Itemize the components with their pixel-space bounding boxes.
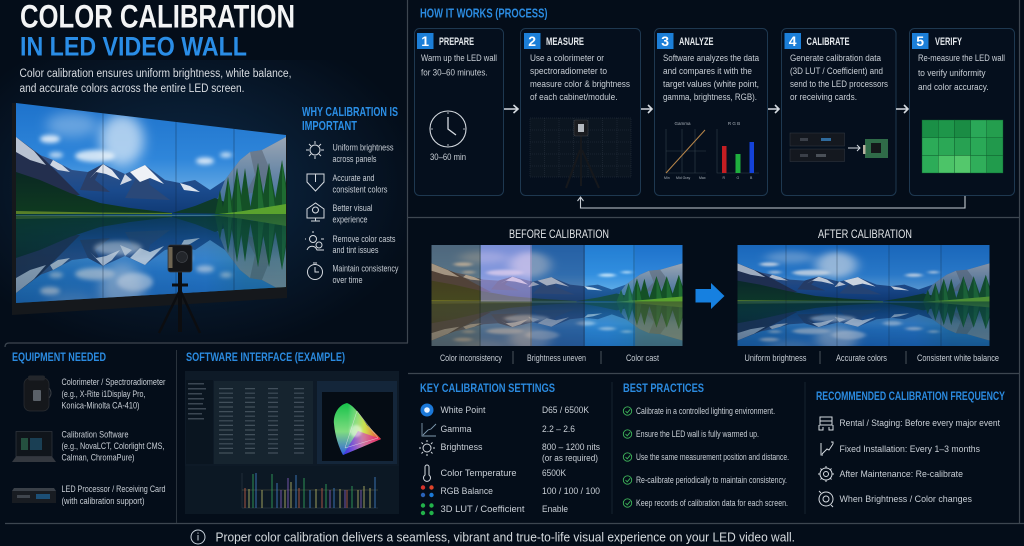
icon: monitor house <box>307 203 324 221</box>
software text: Calman, ChromaPure) <box>62 452 134 464</box>
item text: uniform brightness: across panels <box>332 154 377 165</box>
panel: key calibration settings: KEY CALIBRATION SETTINGS <box>420 381 555 395</box>
step 2: measure: spectroradiometer to <box>530 66 607 77</box>
step 4: calibrate: (3D LUT / Coefficient) and <box>790 66 883 77</box>
step 1: prepare: 30–60 min <box>430 152 466 163</box>
title: IN LED VIDEO WALL <box>20 32 247 62</box>
setting: RGB balance <box>440 486 600 497</box>
before captions: Color cast <box>626 353 659 364</box>
step 5: verify: and color accuracy. <box>918 82 988 93</box>
processor text: (with calibration support) <box>62 496 144 507</box>
item text: colour casts: and tint issues <box>332 245 379 256</box>
icon: colorimeter <box>24 376 51 411</box>
table rows <box>188 383 304 454</box>
step 5: verify <box>910 28 1014 196</box>
panel: best practices: BEST PRACTICES <box>623 381 704 395</box>
colorimeter text <box>62 377 166 412</box>
step 4: calibrate: send to the LED processors <box>790 79 888 90</box>
icon: thermometer <box>424 465 430 481</box>
item text: accurate colors <box>332 173 388 196</box>
item text: accurate colors: Accurate and <box>332 173 374 184</box>
icon: colour shield <box>307 174 324 191</box>
setting: brightness: Brightness <box>440 442 483 453</box>
step 1: prepare: 1 <box>421 33 429 49</box>
step 3: analyze: 3 <box>661 33 669 49</box>
RGB bar chart: R G B <box>728 121 740 126</box>
step 3: analyze: target values (white point, <box>663 79 759 90</box>
step 2: measure: MEASURE <box>546 36 584 48</box>
panel: key calibration settings <box>419 381 600 515</box>
step 2: measure <box>520 28 640 196</box>
arrow <box>896 105 908 113</box>
step 1: prepare: Warm up the LED wall <box>421 53 497 64</box>
how it works heading: HOW IT WORKS (PROCESS) <box>420 6 548 20</box>
before calibration: BEFORE CALIBRATION <box>509 229 609 241</box>
icon: fixed install <box>821 442 833 455</box>
colorimeter text: (e.g., X-Rite i1Display Pro, <box>62 389 146 400</box>
step 5: verify: to verify uniformity <box>918 68 986 79</box>
icon: clock <box>430 111 466 147</box>
item text: uniform brightness <box>332 142 394 165</box>
step 3: analyze: gamma, brightness, RGB). <box>663 92 757 103</box>
step 1: prepare: PREPARE <box>439 36 474 48</box>
icon: rental <box>819 417 833 430</box>
gamma chart: Mid Gray <box>676 176 690 180</box>
setting: 3D LUT: Enable <box>542 504 568 515</box>
title <box>20 0 295 62</box>
RGB bar chart: G <box>736 176 740 180</box>
setting: brightness: 800 – 1200 nits <box>542 442 600 453</box>
colorimeter text: Colorimeter / Spectroradiometer <box>62 377 166 388</box>
measurement grid <box>530 118 631 177</box>
icon: laptop <box>12 432 56 462</box>
intro text: and accurate colors across the entire LED screen. <box>20 83 244 95</box>
panel: software interface: SOFTWARE INTERFACE (EXAMPLE) <box>186 350 345 364</box>
setting: colour temperature: 6500K <box>542 468 567 479</box>
item text: better visual <box>332 203 372 226</box>
intro text <box>20 68 292 95</box>
icon: colour cast <box>305 231 324 250</box>
icon: gear <box>818 466 834 482</box>
after image <box>738 240 993 364</box>
item text: colour casts: Remove color casts <box>332 234 396 245</box>
step 2: measure: of each cabinet/module. <box>530 92 618 103</box>
receiving card <box>863 139 888 158</box>
practices text: Re-calibrate periodically to maintain consistency. <box>636 475 787 485</box>
intro text: Color calibration ensures uniform brightness, white balance, <box>20 68 292 80</box>
item text: consistency: over time <box>332 275 362 286</box>
step 2: measure: measure color & brightness <box>530 79 630 90</box>
processor text: LED Processor / Receiving Card <box>62 484 166 495</box>
left background glow <box>0 60 407 342</box>
frequency: change: When Brightness / Color changes <box>840 494 972 505</box>
arrow to card <box>848 145 860 151</box>
LED wall with camera <box>12 90 290 340</box>
item text: consistency: Maintain consistency <box>332 264 399 274</box>
setting: brightness: (or as required) <box>542 453 598 464</box>
gamma chart: Gamma <box>674 121 691 126</box>
why calibration is important: IMPORTANT <box>302 119 357 133</box>
step 4: calibrate: Generate calibration data <box>790 53 882 64</box>
frequency: rental: Rental / Staging: Before every major event <box>840 418 1000 429</box>
RGB bar chart: B <box>750 176 753 180</box>
processor text <box>62 484 166 507</box>
setting: 3D LUT <box>440 504 568 515</box>
icon: stopwatch <box>308 263 322 280</box>
setting: gamma: 2.2 – 2.6 <box>542 424 575 435</box>
practices text: Keep records of calibration data for each screen. <box>636 498 788 508</box>
icon: cycle gear <box>819 491 833 507</box>
tripod <box>159 272 200 333</box>
frequency: maintenance: After Maintenance: Re-calibrate <box>840 469 963 480</box>
return arrow <box>578 196 965 208</box>
step 3: analyze <box>654 28 768 196</box>
after captions <box>744 351 999 364</box>
after calibration <box>738 229 999 364</box>
bar chart <box>242 473 378 508</box>
blue arrow <box>696 283 724 309</box>
panel: equipment needed: EQUIPMENT NEEDED <box>12 350 106 364</box>
step 5: verify: 5 <box>916 33 924 49</box>
arrow <box>504 105 518 113</box>
icon: info <box>191 530 205 544</box>
tripod and meter <box>566 120 599 188</box>
item text: uniform brightness: Uniform brightness <box>332 142 394 154</box>
setting: gamma <box>440 424 575 435</box>
setting: RGB balance: RGB Balance <box>440 486 493 497</box>
setting: white point: D65 / 6500K <box>542 405 590 416</box>
step 3: analyze: ANALYZE <box>679 36 714 48</box>
icon: gamma curve <box>422 423 436 436</box>
after captions: Uniform brightness <box>744 353 807 364</box>
item text: consistency <box>332 264 399 286</box>
icon: white point <box>420 404 434 416</box>
icon: brightness <box>419 440 435 456</box>
setting: gamma: Gamma <box>440 424 472 435</box>
after captions: Consistent white balance <box>917 353 999 364</box>
step 4: calibrate: 4 <box>789 33 797 49</box>
after calibration: AFTER CALIBRATION <box>818 229 912 241</box>
step 3: analyze: Software analyzes the data <box>663 53 760 64</box>
practices text: Calibrate in a controlled lighting environment. <box>636 406 775 416</box>
setting: white point: White Point <box>440 405 486 416</box>
setting: colour temperature <box>440 468 567 479</box>
panel: equipment needed <box>12 350 166 507</box>
before captions: Color inconsistency <box>440 353 502 364</box>
camera head <box>168 245 192 272</box>
step 4: calibrate: CALIBRATE <box>806 36 850 48</box>
RGB bar chart: R <box>722 176 726 180</box>
item text: better visual: experience <box>332 214 368 226</box>
icon: sun <box>306 141 324 159</box>
software text: (e.g., NovaLCT, Colorlight CMS, <box>62 441 164 452</box>
arrow <box>768 105 779 113</box>
software window <box>185 371 399 514</box>
setting: colour temperature: Color Temperature <box>440 468 516 479</box>
before image <box>432 240 686 364</box>
processors <box>790 133 844 162</box>
practices text <box>636 406 789 508</box>
item text: accurate colors: consistent colors <box>332 184 388 196</box>
step 1: prepare: for 30–60 minutes. <box>421 68 488 78</box>
panel: software interface <box>185 350 399 514</box>
setting: 3D LUT: 3D LUT / Coefficient <box>440 504 525 515</box>
before captions: Brightness uneven <box>527 353 586 364</box>
panel: recommended calibration frequency <box>816 389 1005 507</box>
practices text: Ensure the LED wall is fully warmed up. <box>636 429 759 439</box>
panel: best practices <box>623 381 789 508</box>
item text: colour casts <box>332 234 396 256</box>
before calibration <box>432 229 686 364</box>
green uniformity grid <box>922 120 1003 173</box>
practices text: Use the same measurement position and distance. <box>636 452 789 462</box>
setting: RGB balance: 100 / 100 / 100 <box>542 486 600 497</box>
setting: brightness <box>440 442 600 464</box>
icon: green dots <box>421 503 434 515</box>
before captions <box>440 351 659 364</box>
gamma chart <box>664 121 706 180</box>
why calibration is important: WHY CALIBRATION IS <box>302 105 398 119</box>
icon: RGB dots <box>421 485 434 497</box>
software text <box>62 430 164 464</box>
RGB bar chart <box>717 121 759 180</box>
after captions: Accurate colors <box>836 353 887 364</box>
why calibration is important <box>302 105 399 286</box>
footer message: Proper color calibration delivers a seamless, vibrant and true-to-life visual experience on your LED video wall. <box>216 530 795 544</box>
icon: processor <box>12 488 56 503</box>
gamma chart: Max <box>699 176 706 180</box>
step 3: analyze: and compares it with the <box>663 66 752 77</box>
frequency: fixed: Fixed Installation: Every 1–3 months <box>840 444 980 455</box>
gamma chart: Min <box>664 176 670 180</box>
step 4: calibrate: or receiving cards. <box>790 92 857 103</box>
step 5: verify: VERIFY <box>935 36 962 48</box>
setting: white point <box>440 405 590 416</box>
step 2: measure: Use a colorimeter or <box>530 53 605 64</box>
chromaticity chart <box>322 392 393 461</box>
item text: better visual: Better visual <box>332 203 372 214</box>
step 1: prepare <box>414 28 504 196</box>
step 2: measure: 2 <box>528 33 536 49</box>
checklist <box>623 407 632 507</box>
colorimeter text: Konica-Minolta CA-410) <box>62 400 140 412</box>
step 4: calibrate <box>782 28 896 196</box>
arrow <box>641 105 652 113</box>
software text: Calibration Software <box>62 430 128 440</box>
